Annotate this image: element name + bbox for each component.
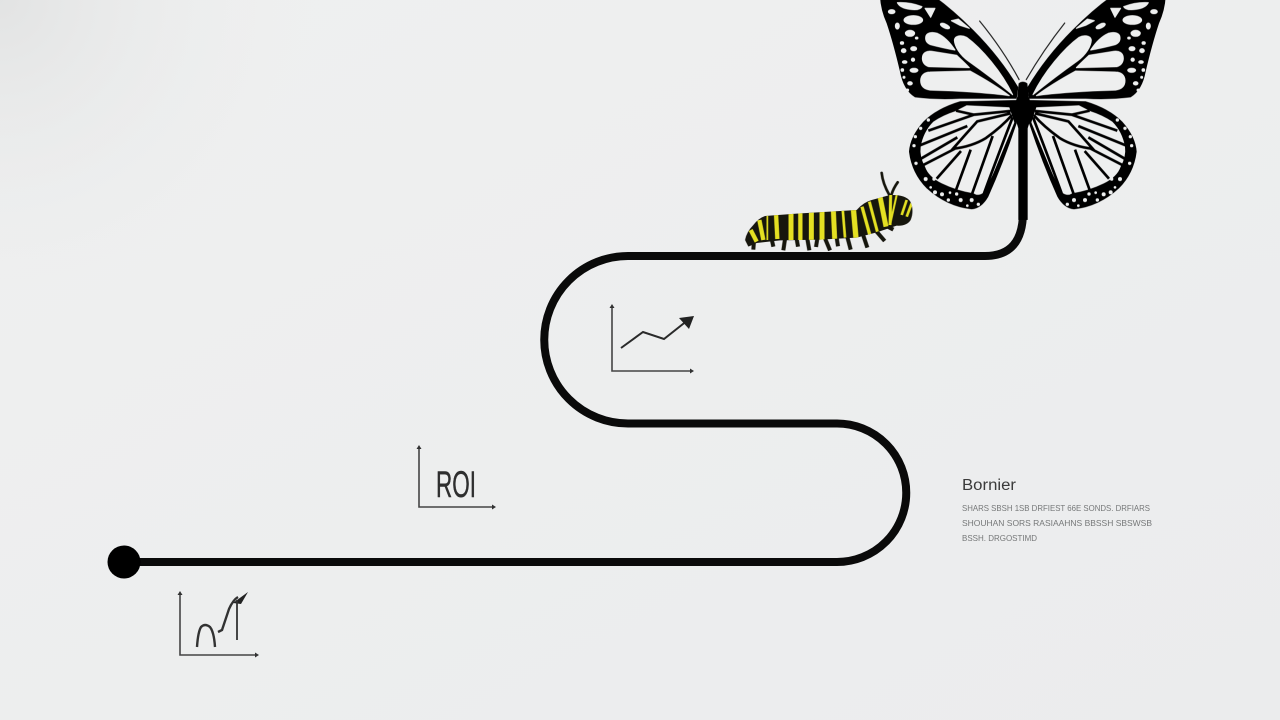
start dot — [108, 546, 140, 578]
caption body — [962, 503, 1152, 543]
icon: butterfly — [880, 0, 1166, 220]
caption body: BSSH. DRGOSTIMD — [962, 533, 1037, 543]
growth curve — [197, 597, 238, 647]
trend arrow — [621, 320, 688, 348]
icon: rising trend chart — [610, 304, 694, 374]
ROI label: ROI — [436, 464, 476, 505]
body with stripes — [744, 195, 913, 246]
icon: ROI chart — [416, 445, 496, 510]
icon: caterpillar — [740, 173, 917, 250]
right wings — [1027, 0, 1166, 209]
legs — [753, 227, 893, 250]
caption body: SHOUHAN SORS RASIAAHNS BBSSH SBSWSB — [962, 518, 1152, 528]
caption heading: Bornier — [962, 477, 1016, 494]
left wings — [880, 0, 1018, 209]
antennae — [882, 173, 898, 195]
caption body: SHARS SBSH 1SB DRFIEST 66E SONDS. DRFIARS — [962, 503, 1150, 513]
winding journey path — [108, 100, 1023, 578]
butterfly body — [1015, 82, 1031, 220]
antennae — [979, 21, 1065, 80]
icon: sketched growth chart — [178, 591, 259, 658]
text block: Bornier caption — [962, 477, 1152, 543]
